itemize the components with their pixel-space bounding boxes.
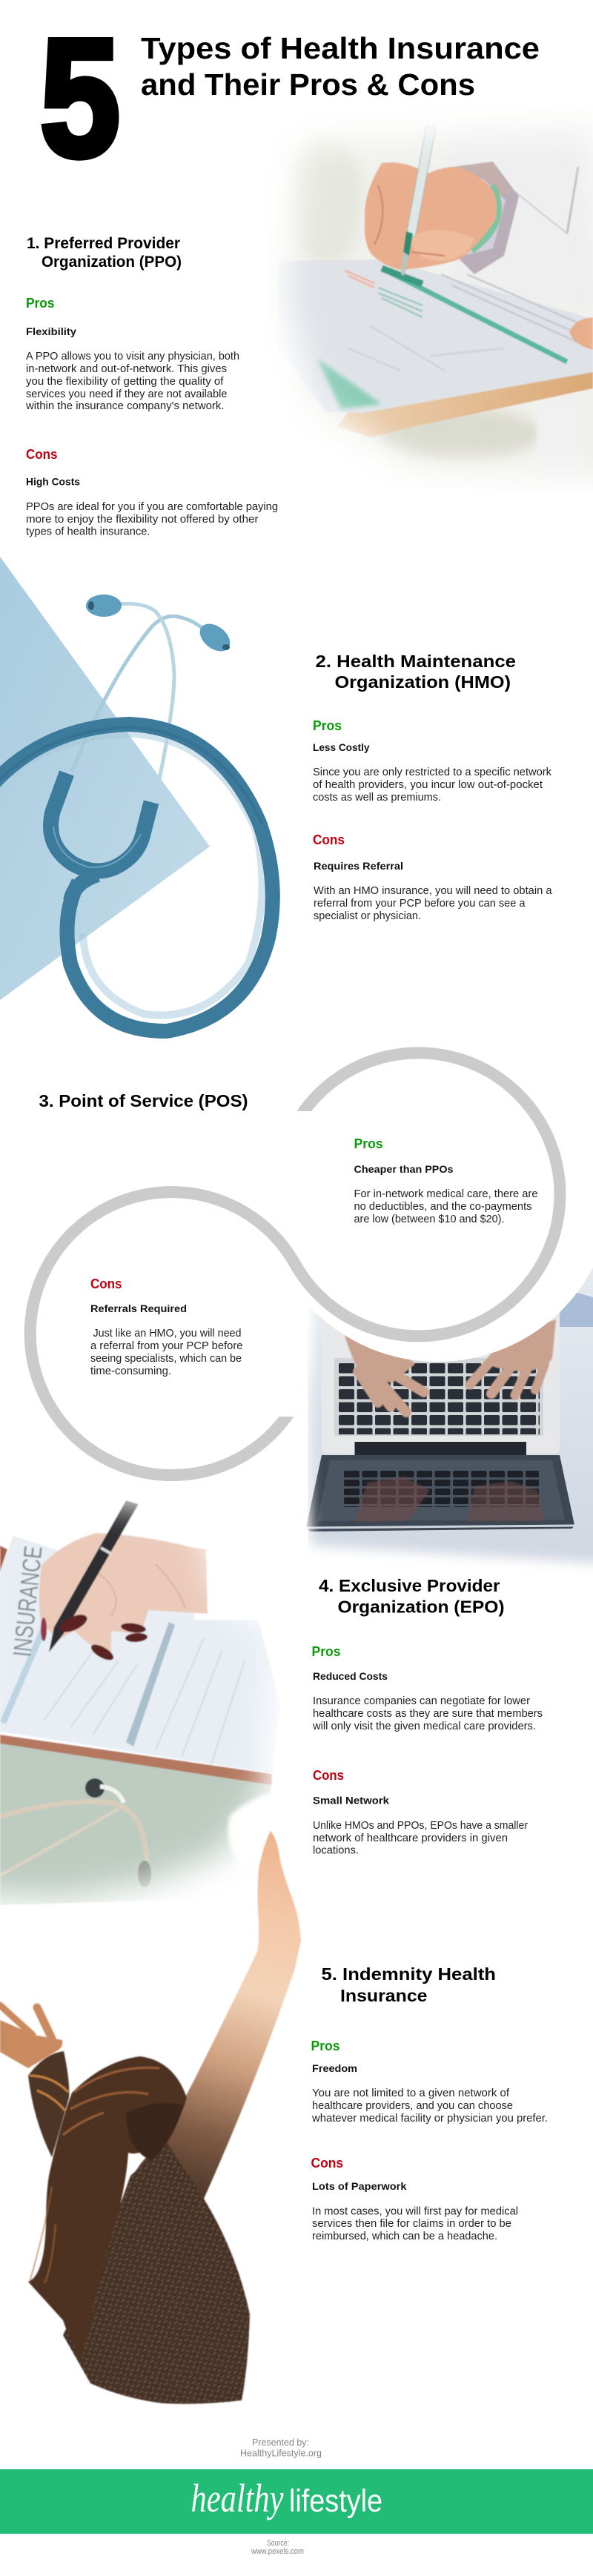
section 5: Indemnity (311, 1964, 548, 2242)
cons: Small Network (313, 1794, 389, 1806)
title text: Types of Health Insurance (141, 31, 540, 65)
body (63, 2142, 250, 2404)
cons: services then file for claims in order to be (312, 2218, 511, 2230)
pros: Pros (313, 718, 342, 733)
pros: no deductibles, and the co-payments (354, 1201, 532, 1213)
source (251, 2539, 304, 2556)
heading: Organization (HMO) (335, 672, 511, 692)
Y-shaped yoke (51, 773, 151, 871)
cons: locations. (313, 1844, 359, 1856)
main tube (0, 724, 273, 1031)
cons: seeing specialists, which can be (90, 1353, 242, 1365)
finger at right edge (569, 317, 593, 350)
cons: PPOs are ideal for you if you are comfortable paying (26, 501, 278, 513)
hand (39, 1533, 208, 1655)
pros: healthcare costs as they are sure that members (313, 1708, 543, 1720)
clipboard paper (278, 259, 593, 413)
clipboard board (337, 369, 593, 437)
heading (316, 652, 516, 692)
cons: Cons (313, 832, 345, 847)
pros: Cheaper than PPOs (354, 1163, 454, 1175)
pros: in-network and out-of-network. This gives (26, 363, 227, 375)
pros: healthcare providers, and you can choose (312, 2100, 513, 2112)
cons: reimbursed, which can be a headache. (312, 2231, 497, 2242)
pros: costs as well as premiums. (313, 792, 441, 804)
left sleeve (28, 2051, 69, 2157)
coat cuff lower (225, 1792, 270, 1856)
cons (90, 1276, 243, 1377)
cons: With an HMO insurance, you will need to obtain a (314, 885, 552, 897)
cons: Lots of Paperwork (312, 2180, 407, 2192)
pros (354, 1136, 538, 1225)
heading: Insurance (340, 1986, 427, 2005)
pros: Less Costly (313, 741, 370, 753)
presented by: HealthyLifestyle.org (240, 2448, 322, 2458)
photo: hand filling in insurance form (0, 1500, 276, 1905)
big numeral 5: 5 (40, 4, 120, 191)
pros (311, 1643, 543, 1732)
cons: Cons (311, 2155, 343, 2171)
pros: Freedom (312, 2062, 357, 2074)
cons: Requires Referral (314, 860, 403, 872)
cons: types of health insurance. (26, 526, 150, 538)
hands (342, 1320, 556, 1412)
pros: For in-network medical care, there are (354, 1188, 538, 1200)
pros: whatever medical facility or physician you prefer. (311, 2113, 548, 2125)
pros: Pros (311, 1643, 341, 1659)
pen (49, 1500, 139, 1652)
title (40, 4, 540, 191)
metal tubes (72, 603, 206, 800)
form bars (0, 1622, 245, 1764)
pros: you the flexibility of getting the quality of (26, 376, 225, 388)
form paper (0, 1536, 280, 1773)
cons (313, 1767, 528, 1856)
printed word on form: INSURANCE (8, 1545, 48, 1658)
section 2: HMO (313, 652, 552, 922)
heading (319, 1576, 504, 1616)
nails (41, 1611, 148, 1663)
pros: You are not limited to a given network of (312, 2087, 510, 2099)
cons: Cons (90, 1276, 122, 1291)
pen (406, 126, 436, 237)
pros: Pros (26, 295, 55, 311)
sleeve (194, 1598, 258, 1620)
pros: Flexibility (26, 325, 76, 337)
cons (313, 832, 552, 922)
source: Source: (267, 2539, 289, 2548)
logo (191, 2476, 382, 2520)
photo: stethoscope on blue shape (0, 557, 273, 1031)
pros: A PPO allows you to visit any physician, both (26, 351, 239, 362)
keyboard (334, 1358, 543, 1436)
section 3: POS (30, 1010, 593, 1475)
title text (141, 31, 540, 102)
laptop screen (306, 1455, 574, 1532)
cons: Cons (26, 446, 58, 462)
logo: healthy (191, 2476, 284, 2520)
photo: hands typing on laptop (306, 1268, 593, 1568)
pros: Insurance companies can negotiate for lower (313, 1695, 530, 1707)
cons: a referral from your PCP before (90, 1340, 243, 1352)
tube shadow (0, 734, 262, 1016)
heading: 4. Exclusive Provider (319, 1576, 500, 1595)
pros: of health providers, you incur low out-of-pocket (313, 779, 543, 791)
desk (308, 1268, 593, 1568)
hinge (354, 1442, 526, 1455)
cons: Referrals Required (90, 1302, 187, 1314)
pros: will only visit the given medical care providers. (312, 1721, 536, 1732)
heading: 3. Point of Service (POS) (39, 1091, 248, 1110)
hand (365, 162, 497, 270)
S-shaped grey ring (30, 1053, 560, 1475)
laptop base (322, 1312, 560, 1454)
heading: 2. Health Maintenance (316, 652, 516, 671)
cons (26, 446, 278, 538)
cons: In most cases, you will first pay for medical (312, 2206, 518, 2218)
pros (313, 718, 552, 804)
white disk overlapping laptop (262, 1010, 593, 1362)
cons: specialist or physician. (314, 910, 421, 922)
photo: doctor writing on clipboard (279, 125, 593, 481)
source: www.pexels.com (251, 2547, 304, 2556)
clipboard edge (0, 1735, 272, 1785)
cons: Just like an HMO, you will need (93, 1328, 242, 1340)
cons: referral from your PCP before you can see a (314, 898, 526, 910)
cons: Cons (313, 1767, 344, 1783)
heading: Organization (EPO) (338, 1597, 504, 1616)
cons: Unlike HMOs and PPOs, EPOs have a smaller (313, 1820, 528, 1832)
pros (311, 2038, 548, 2125)
heading: Organization (PPO) (42, 254, 182, 271)
photo: woman raising her arms (0, 1831, 301, 2404)
stethoscope on desk (0, 1778, 151, 1887)
cons: network of healthcare providers in given (313, 1832, 508, 1844)
shirt sleeve (454, 162, 519, 274)
pros: Since you are only restricted to a specific network (313, 766, 552, 778)
cons (311, 2155, 518, 2242)
pros: Pros (354, 1136, 382, 1151)
presented by: Presented by: (252, 2437, 309, 2448)
hair (28, 2056, 187, 2360)
cons: High Costs (26, 476, 80, 488)
footer band with logo (0, 2469, 593, 2534)
raised arm (133, 1831, 301, 2199)
heading (27, 235, 182, 271)
presented by (240, 2437, 322, 2458)
pros: within the insurance company's network. (25, 400, 225, 412)
desk (0, 1738, 272, 1905)
section 1: PPO (25, 235, 278, 538)
left hand (0, 2005, 62, 2068)
cons: more to enjoy the flexibility not offered by other (26, 514, 259, 526)
section 4: EPO (311, 1576, 543, 1856)
ear tips (86, 595, 235, 657)
pros: services you need if they are not available (26, 388, 227, 400)
pros: Pros (311, 2038, 339, 2053)
heading: 5. Indemnity Health (322, 1964, 496, 1984)
logo: lifestyle (289, 2483, 382, 2519)
pros (25, 295, 239, 412)
pros: Reduced Costs (313, 1670, 388, 1682)
heading: 1. Preferred Provider (27, 235, 180, 252)
heading (322, 1964, 496, 2005)
title text: and Their Pros & Cons (141, 67, 475, 102)
blue triangle (0, 557, 210, 1000)
pros: are low (between $10 and $20). (354, 1213, 504, 1225)
cons: time-consuming. (90, 1365, 171, 1377)
